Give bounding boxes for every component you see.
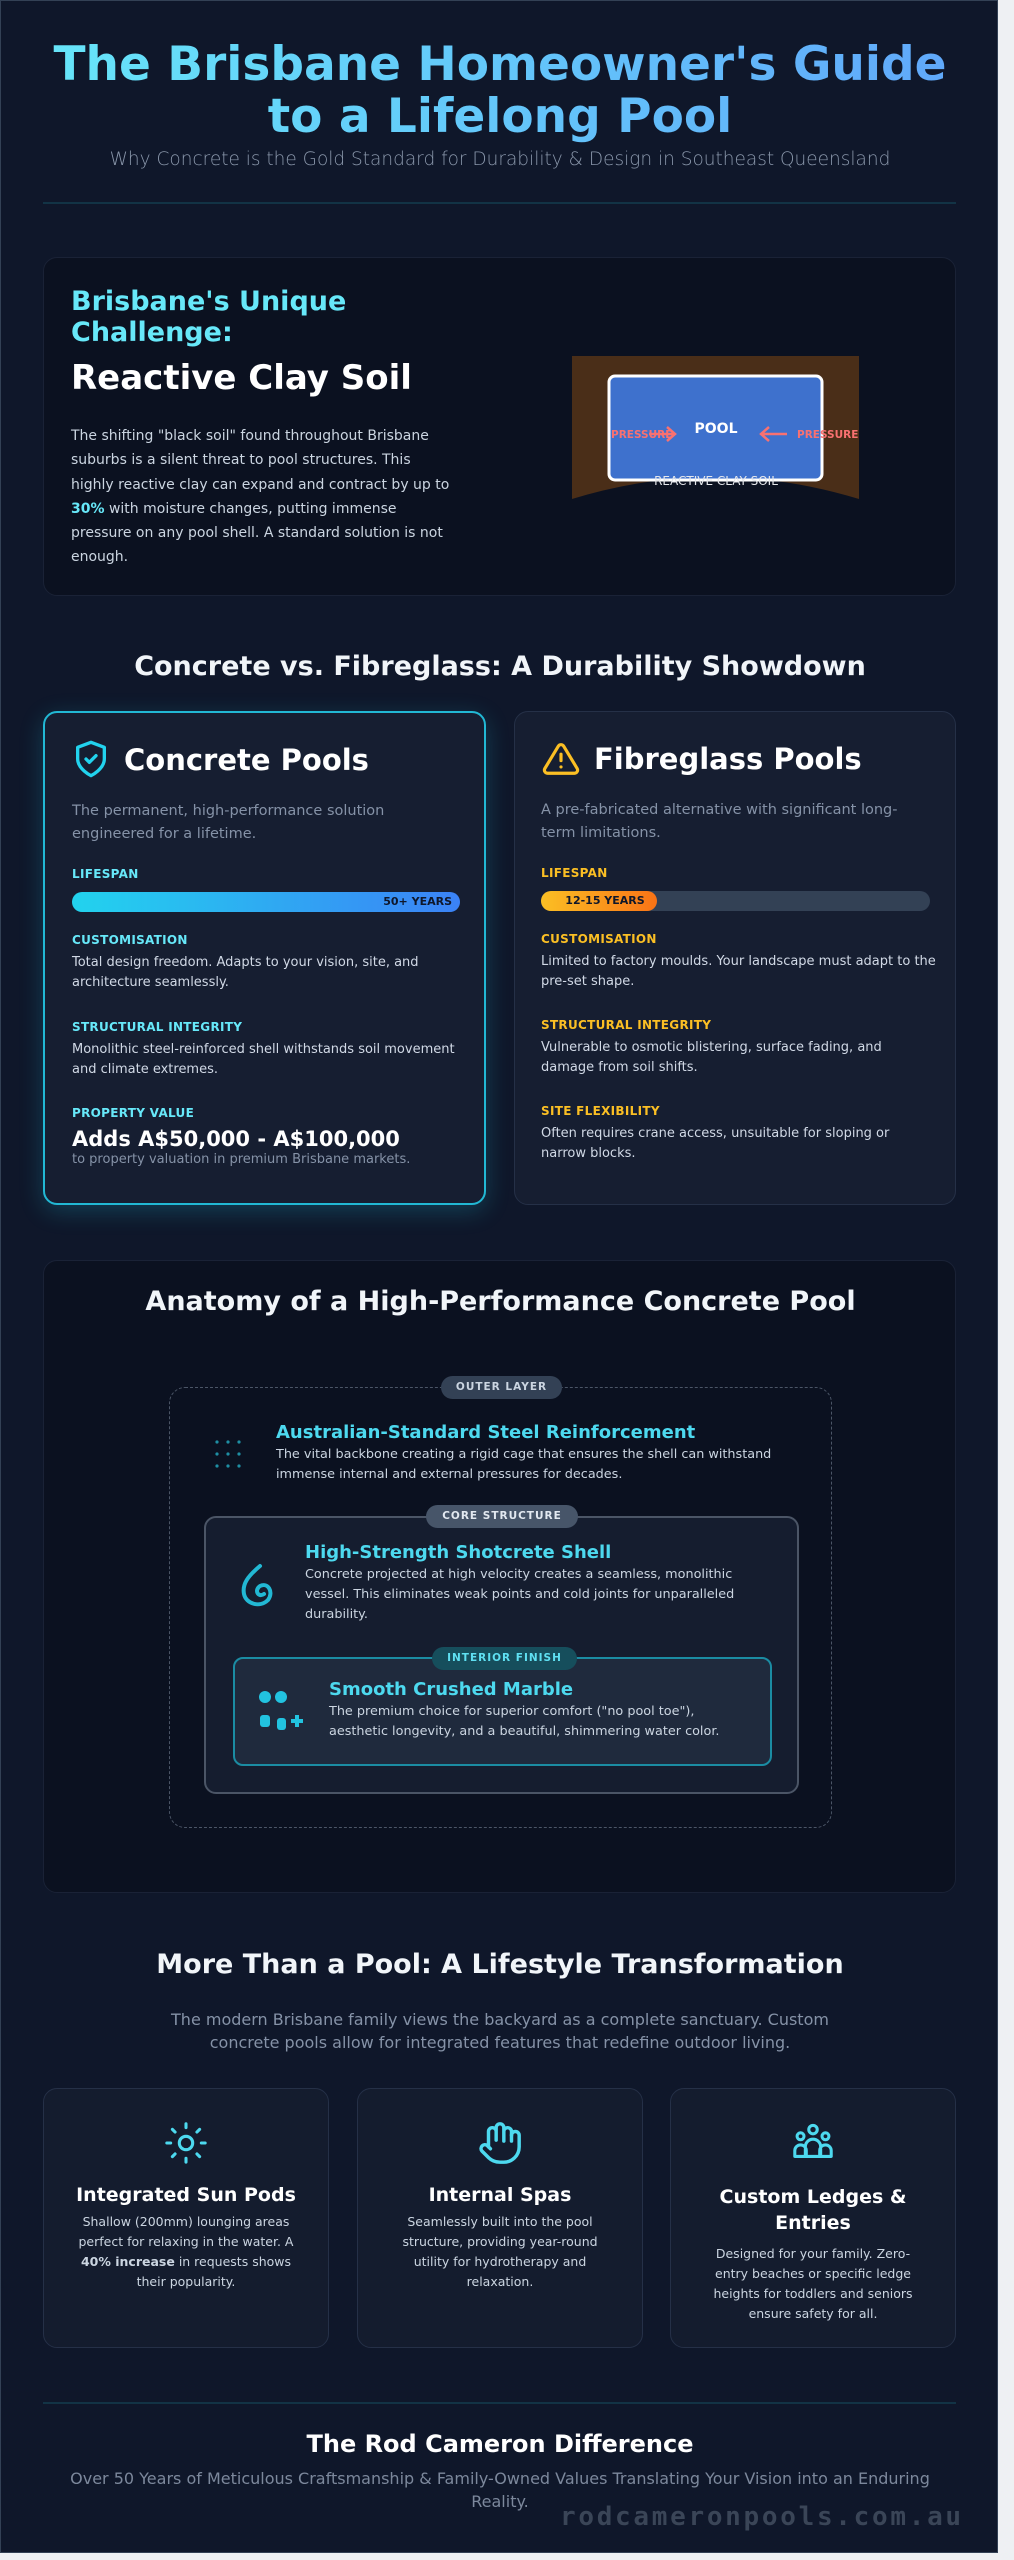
heading: showdown: Concrete vs. Fibreglass: A Durability Showdown [134,651,866,682]
property value: to property valuation in premium Brisbane markets. [72,1152,410,1167]
layer: interior marble [233,1657,772,1766]
title: to a Lifelong Pool [268,89,732,144]
pill: interior finish [432,1647,577,1670]
title: Entries [775,2212,851,2234]
text: Seamlessly built into the pool structure, providing year-round utility for hydrotherapy and relaxation. [402,2214,598,2289]
subtitle: Why Concrete is the Gold Standard for Durability & Design in Southeast Queensland [110,149,890,170]
icon: sun [165,2122,207,2164]
text: steel reinforcement [276,1422,771,1482]
card: concrete pools [43,711,486,1205]
diagram: pool in clay soil: PRESSURE [611,429,672,441]
heading: unique challenge: Brisbane's Unique [71,286,346,317]
structural integrity: Vulnerable to osmotic blistering, surface fading, and damage from soil shifts. [541,1040,882,1075]
customisation: Limited to factory moulds. Your landscape must adapt to the pre-set shape. [541,954,936,989]
heading: unique challenge [71,286,346,348]
site flexibility: Often requires crane access, unsuitable for sloping or narrow blocks. [541,1126,889,1161]
diagram: pool in clay soil: POOL [695,421,738,437]
text: shotcrete shell [305,1542,734,1622]
title: Integrated Sun Pods [76,2184,296,2206]
panel: reactive clay soil [43,257,956,596]
text: shotcrete shell: Concrete projected at high velocity creates a seamless, monolithic vessel. This eliminates weak points and cold joints for unparalleled durability. [305,1567,734,1622]
heading: anatomy: Anatomy of a High-Performance Concrete Pool [145,1286,856,1317]
panel: anatomy [43,1260,956,1893]
customisation [72,933,419,990]
icon: shotcrete swirl [242,1564,272,1606]
customisation: Total design freedom. Adapts to your vision, site, and architecture seamlessly. [72,955,419,990]
structural integrity [541,1018,882,1075]
heading: lifestyle: More Than a Pool: A Lifestyle Transformation [156,1949,844,1980]
text: Designed for your family. Zero-entry beaches or specific ledge heights for toddlers and seniors ensure safety for all. [713,2246,913,2321]
text: clay description: The shifting "black soil" found throughout Brisbane suburbs is a silent threat to pool structures. This highly reactive clay can expand and contract by up to 30% with moisture changes, putting immense pressure on any pool shell. A standard solution is not enough. [71,428,449,565]
property value [72,1106,410,1167]
footer heading: The Rod Cameron Difference [306,2430,694,2458]
icon: warning [542,743,580,775]
description: A pre-fabricated alternative with significant long-term limitations. [541,802,898,841]
pill: outer layer: OUTER LAYER [456,1381,547,1393]
pill: outer layer [441,1376,562,1399]
site flexibility [541,1104,890,1161]
customisation [541,932,936,989]
heading: reactive clay soil: Reactive Clay Soil [71,358,412,398]
pill: core structure [426,1505,578,1528]
text: Shallow (200mm) lounging areas perfect for relaxing in the water. A 40% increase in requests shows their popularity. [78,2214,293,2289]
text: shotcrete shell: High-Strength Shotcrete Shell [305,1542,611,1563]
site flexibility: SITE FLEXIBILITY [541,1104,660,1118]
title: Internal Spas [429,2184,571,2206]
icon: family [793,2124,833,2158]
diagram: pool in clay soil: REACTIVE CLAY SOIL [654,474,778,488]
text: steel reinforcement: Australian-Standard Steel Reinforcement [276,1422,695,1443]
bar: 12-15 years [541,891,930,911]
description: The permanent, high-performance solution engineered for a lifetime. [72,803,384,842]
heading: unique challenge: Challenge: [71,317,233,348]
card: sun pods [43,2088,329,2348]
property value: PROPERTY VALUE [72,1106,194,1120]
title [1,39,999,143]
structural integrity: STRUCTURAL INTEGRITY [541,1018,711,1032]
icon: shield check [76,740,106,778]
diagram: pool in clay soil [572,356,859,499]
pill: interior finish: INTERIOR FINISH [447,1652,562,1664]
title: Custom Ledges & [720,2186,906,2208]
title [720,2186,906,2234]
layer: core shotcrete [204,1516,799,1794]
layer: outer steel [169,1387,832,1828]
customisation: CUSTOMISATION [541,932,657,946]
card: custom ledges [670,2088,956,2348]
card title: Fibreglass Pools [594,742,862,776]
text: crushed marble: The premium choice for superior comfort ("no pool toe"), aesthetic longevity, and a beautiful, shimmering water color. [329,1704,719,1739]
diagram: pool in clay soil: PRESSURE [797,429,858,441]
bar: 12-15 years: 12-15 YEARS [565,894,645,907]
customisation: CUSTOMISATION [72,933,188,947]
icon: hand [479,2122,521,2164]
text: lifestyle intro: The modern Brisbane family views the backyard as a complete sanctuary. Custom concrete pools allow for integrated features that redefine outdoor living. [171,2010,829,2052]
icon: steel grid [215,1440,241,1468]
card: fibreglass pools [514,711,956,1205]
structural integrity [72,1020,455,1077]
lifespan: LIFESPAN [541,866,608,880]
lifespan: LIFESPAN [72,867,139,881]
property value: Adds A$50,000 - A$100,000 [72,1127,400,1151]
bar: 50+ years: 50+ YEARS [383,895,452,908]
title: The Brisbane Homeowner's Guide [54,37,946,92]
card title: Concrete Pools [124,743,369,777]
watermark: rodcameronpools.com.au [560,2502,964,2532]
text: crushed marble [328,1679,719,1739]
text: crushed marble: Smooth Crushed Marble [329,1679,573,1700]
text: steel reinforcement: The vital backbone creating a rigid cage that ensures the shell can withstand immense internal and external pressures for decades. [276,1447,771,1482]
pill: core structure: CORE STRUCTURE [442,1510,562,1522]
bar: 50+ years [72,892,460,912]
structural integrity: Monolithic steel-reinforced shell withstands soil movement and climate extremes. [72,1042,455,1077]
structural integrity: STRUCTURAL INTEGRITY [72,1020,242,1034]
footer text: Over 50 Years of Meticulous Craftsmanship & Family-Owned Values Translating Your Vision into an Enduring Reality. [70,2469,930,2511]
icon: marble [259,1691,303,1730]
card: internal spas [357,2088,643,2348]
